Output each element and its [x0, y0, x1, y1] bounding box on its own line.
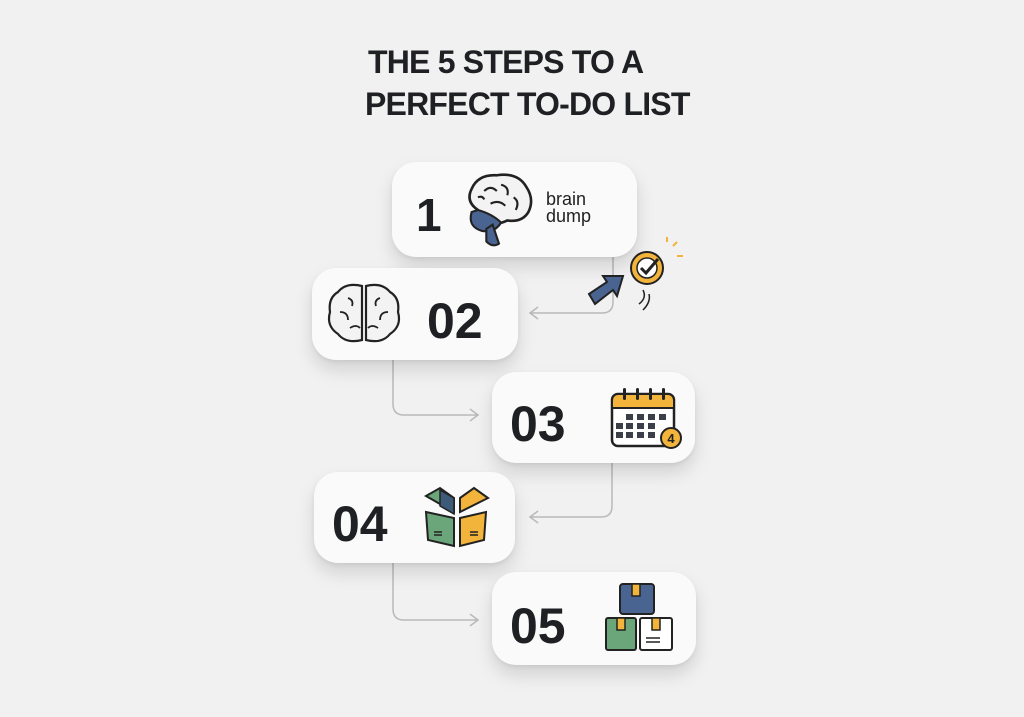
card 3: 03 — [510, 396, 566, 452]
title — [365, 44, 690, 122]
card 3 — [492, 372, 695, 463]
icon: brain side — [468, 173, 532, 246]
icon: calendar — [610, 388, 682, 449]
card 1: brain dump: dump — [546, 206, 591, 226]
card 5 — [492, 572, 696, 665]
card 1: brain dump: 1 — [416, 189, 442, 241]
card 5: 05 — [510, 598, 566, 654]
icon: open box — [424, 486, 490, 548]
title: THE 5 STEPS TO A — [368, 44, 643, 80]
icon: stacked boxes — [605, 583, 673, 651]
card 2 — [312, 268, 518, 360]
card 2: 02 — [427, 293, 483, 349]
icon: calendar: 4 — [667, 431, 675, 446]
target check icon — [588, 237, 683, 310]
icon: brain top — [328, 284, 400, 342]
card 4 — [314, 472, 515, 563]
card 4: 04 — [332, 496, 388, 552]
card 1: brain dump — [392, 162, 637, 257]
title: PERFECT TO-DO LIST — [365, 86, 690, 122]
card 1: brain dump: brain — [546, 189, 586, 209]
